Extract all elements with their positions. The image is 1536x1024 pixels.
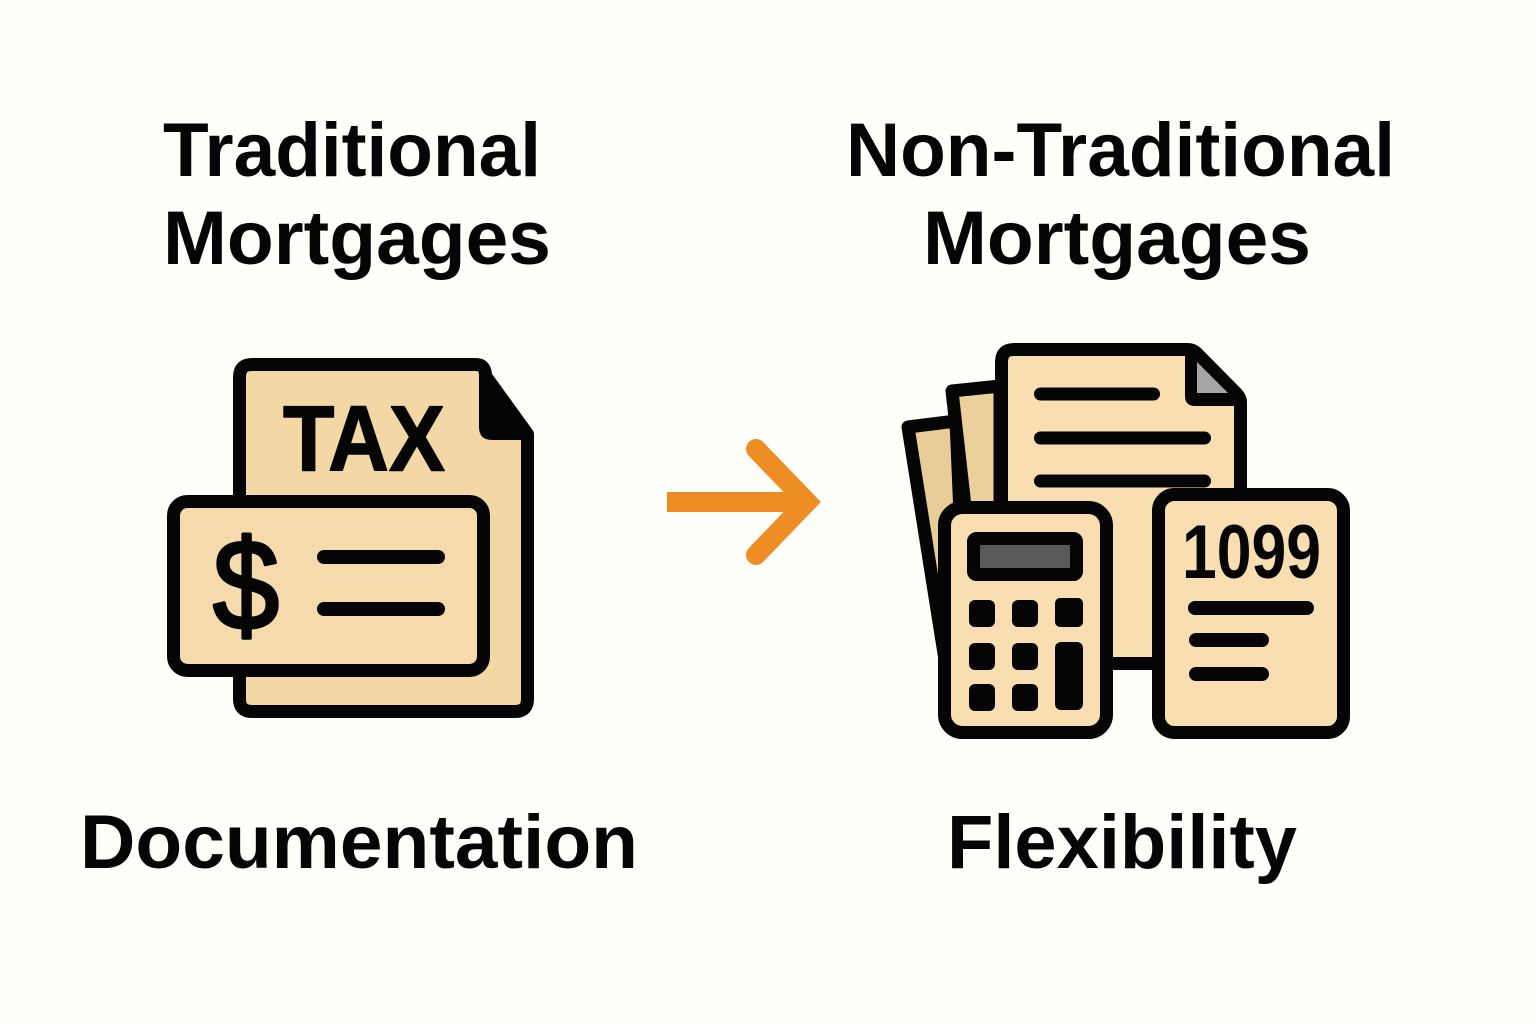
form line one: [1188, 601, 1314, 615]
heading: traditional mortgages: [163, 108, 551, 281]
label: documentation: Documentation: [80, 800, 638, 885]
arrow: [667, 449, 807, 555]
TAX label: TAX: [283, 386, 445, 490]
check line two: [317, 602, 445, 616]
back paper one: [908, 421, 960, 660]
heading: non-traditional mortgages: [846, 108, 1395, 281]
icon: stacked income documents with calculator and 1099: [908, 350, 1344, 732]
calculator: [944, 508, 1106, 732]
tax form page: [240, 364, 528, 712]
document line one: [1034, 388, 1160, 400]
1099 label: 1099: [1182, 510, 1321, 595]
check line one: [317, 550, 445, 564]
heading: traditional mortgages: Traditional: [163, 108, 541, 193]
check card: [174, 502, 484, 670]
folded corner: [1185, 354, 1242, 406]
1099 form: [1158, 494, 1344, 732]
main document: [1002, 350, 1240, 664]
icon: tax document with check: [174, 364, 528, 712]
dollar sign: $: [213, 514, 279, 657]
calculator buttons: [969, 598, 1083, 711]
document line two: [1034, 432, 1211, 444]
form line two: [1189, 633, 1269, 647]
document line three: [1034, 474, 1211, 488]
folded corner: [479, 371, 528, 440]
label: flexibility: Flexibility: [947, 800, 1297, 885]
back paper two: [952, 386, 1000, 515]
calculator screen: [974, 538, 1076, 574]
heading: traditional mortgages: Mortgages: [163, 196, 551, 281]
form line three: [1189, 667, 1269, 681]
heading: non-traditional mortgages: Non-Traditional: [846, 108, 1395, 193]
heading: non-traditional mortgages: Mortgages: [923, 196, 1311, 281]
